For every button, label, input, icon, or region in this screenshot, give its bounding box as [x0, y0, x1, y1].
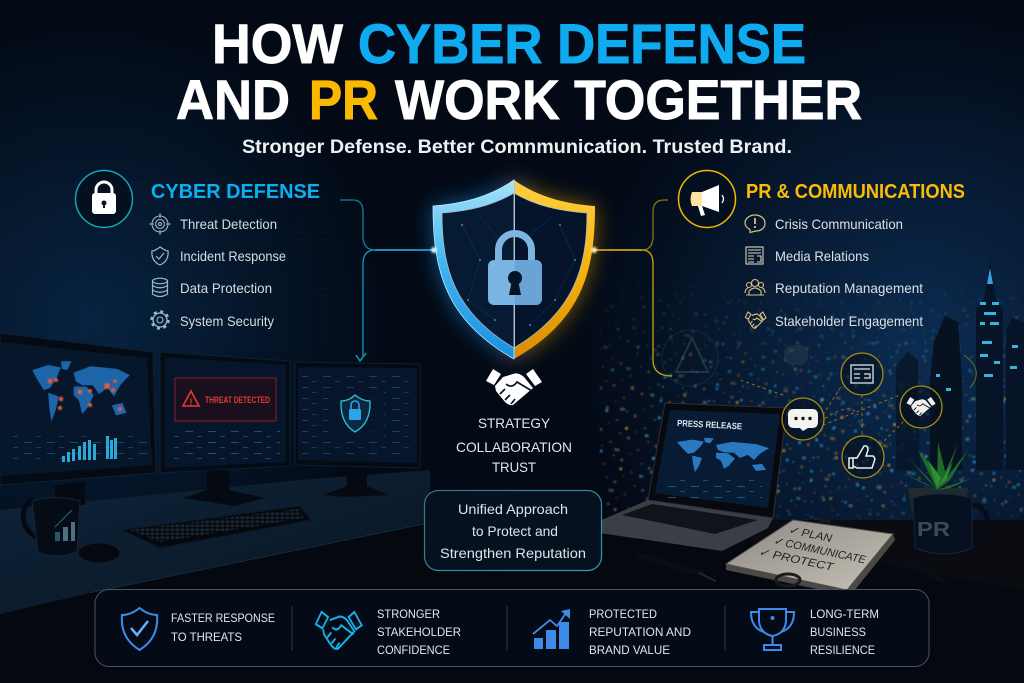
- text: stakeholder confidence: [377, 607, 461, 657]
- PR mug: [913, 494, 987, 554]
- monitor: threat detected: [160, 352, 290, 506]
- list item: Stakeholder Engagement: [775, 313, 923, 329]
- text: business resilience: [810, 607, 879, 657]
- list item: Reputation Management: [775, 280, 923, 296]
- title: [176, 12, 862, 131]
- icon: handshake: [907, 397, 936, 416]
- mouse: [78, 543, 120, 563]
- text: protected reputation: REPUTATION AND: [589, 625, 691, 639]
- icon: trophy: [751, 609, 794, 650]
- collaboration keywords: COLLABORATION: [456, 439, 572, 455]
- clipboard: plan communicate protect: [726, 520, 895, 596]
- icon: rising bar chart: [533, 609, 570, 649]
- heading: PR & COMMUNICATIONS: [746, 181, 965, 203]
- title: HOW: [212, 12, 343, 75]
- city skyline backdrop: [600, 258, 1024, 530]
- icon: shield check: [152, 247, 168, 265]
- panel: outcomes bar: [95, 590, 929, 666]
- icon: newspaper: [746, 247, 763, 264]
- list item: Incident Response: [180, 248, 286, 264]
- icon: chat bubble: [788, 409, 818, 431]
- monitor: shield lock: [295, 362, 420, 497]
- connector: cyber side: [340, 200, 433, 361]
- monitor: threat detected: !: [190, 397, 192, 407]
- icon: megaphone badge: [678, 170, 736, 228]
- list item: Threat Detection: [180, 216, 277, 232]
- text: protected reputation: PROTECTED: [589, 607, 657, 621]
- list item: Media Relations: [775, 248, 869, 264]
- clipboard: plan communicate protect: ✓ COMMUNICATE: [772, 535, 867, 567]
- shield glow: [433, 181, 595, 358]
- icon: target: [149, 213, 171, 235]
- title: CYBER DEFENSE: [358, 12, 806, 75]
- text: faster response: FASTER RESPONSE: [171, 611, 275, 625]
- text: business resilience: BUSINESS: [810, 625, 866, 639]
- monitor: world threat map: [0, 333, 156, 505]
- callout: unified approach: Strengthen Reputation: [440, 545, 586, 561]
- callout: unified approach: to Protect and: [472, 523, 558, 539]
- PR network icons: [740, 353, 976, 478]
- clipboard: plan communicate protect: ✓ PROTECT: [757, 546, 836, 574]
- collaboration keywords: [456, 415, 572, 475]
- pens: [640, 556, 942, 581]
- callout: unified approach: Unified Approach: [458, 501, 568, 517]
- list item: System Security: [180, 313, 274, 329]
- subtitle: Stronger Defense. Better Comnmunication. Trusted Brand.: [242, 136, 792, 158]
- laptop with press release: [590, 403, 787, 551]
- icon: shield check: [122, 608, 157, 650]
- text: protected reputation: [589, 607, 691, 657]
- list item: Crisis Communication: [775, 216, 903, 232]
- icon: gear: [152, 312, 168, 328]
- connector: PR side: [594, 200, 672, 376]
- text: business resilience: RESILIENCE: [810, 643, 875, 657]
- keyboard: [122, 506, 311, 548]
- panel: PR and communications: [678, 170, 965, 329]
- plant: [900, 442, 972, 512]
- text: faster response: [171, 611, 275, 644]
- PR mug: PR: [917, 519, 951, 541]
- text: faster response: TO THREATS: [171, 630, 242, 644]
- heading: CYBER DEFENSE: [151, 181, 320, 203]
- desk: [0, 470, 1024, 683]
- collaboration keywords: STRATEGY: [478, 415, 551, 431]
- icon: news: [851, 365, 873, 383]
- icon: thumbs up: [849, 446, 875, 468]
- title: PR: [309, 68, 378, 131]
- text: business resilience: LONG-TERM: [810, 607, 879, 621]
- text: stakeholder confidence: STAKEHOLDER: [377, 625, 461, 639]
- text: stakeholder confidence: STRONGER: [377, 607, 440, 621]
- text: stakeholder confidence: CONFIDENCE: [377, 643, 450, 657]
- icon: database: [152, 278, 168, 296]
- shield interior: [442, 193, 514, 348]
- icon: outline handshake: [316, 612, 362, 649]
- mug with chart: [23, 498, 80, 556]
- icon: white handshake: [486, 369, 542, 405]
- icon: lock badge: [76, 170, 132, 228]
- shield rim: [433, 180, 514, 359]
- bright connector nodes: [431, 247, 437, 253]
- clipboard: plan communicate protect: ✓ PLAN: [787, 524, 833, 545]
- callout: unified approach: [424, 490, 602, 570]
- laptop with press release: PRESS RELEASE: [677, 418, 742, 431]
- icon: outline handshake: [745, 312, 766, 328]
- collaboration keywords: TRUST: [492, 459, 536, 475]
- padlock: [488, 234, 542, 305]
- text: protected reputation: BRAND VALUE: [589, 643, 670, 657]
- icon: alert bubble: [745, 215, 765, 232]
- title: WORK TOGETHER: [395, 68, 862, 131]
- panel: cyber defense: [76, 170, 320, 329]
- title: AND: [176, 68, 290, 131]
- list item: Data Protection: [180, 280, 272, 296]
- monitor: threat detected: THREAT DETECTED: [205, 395, 270, 405]
- shield with lock: [431, 180, 597, 359]
- icon: people: [745, 280, 765, 295]
